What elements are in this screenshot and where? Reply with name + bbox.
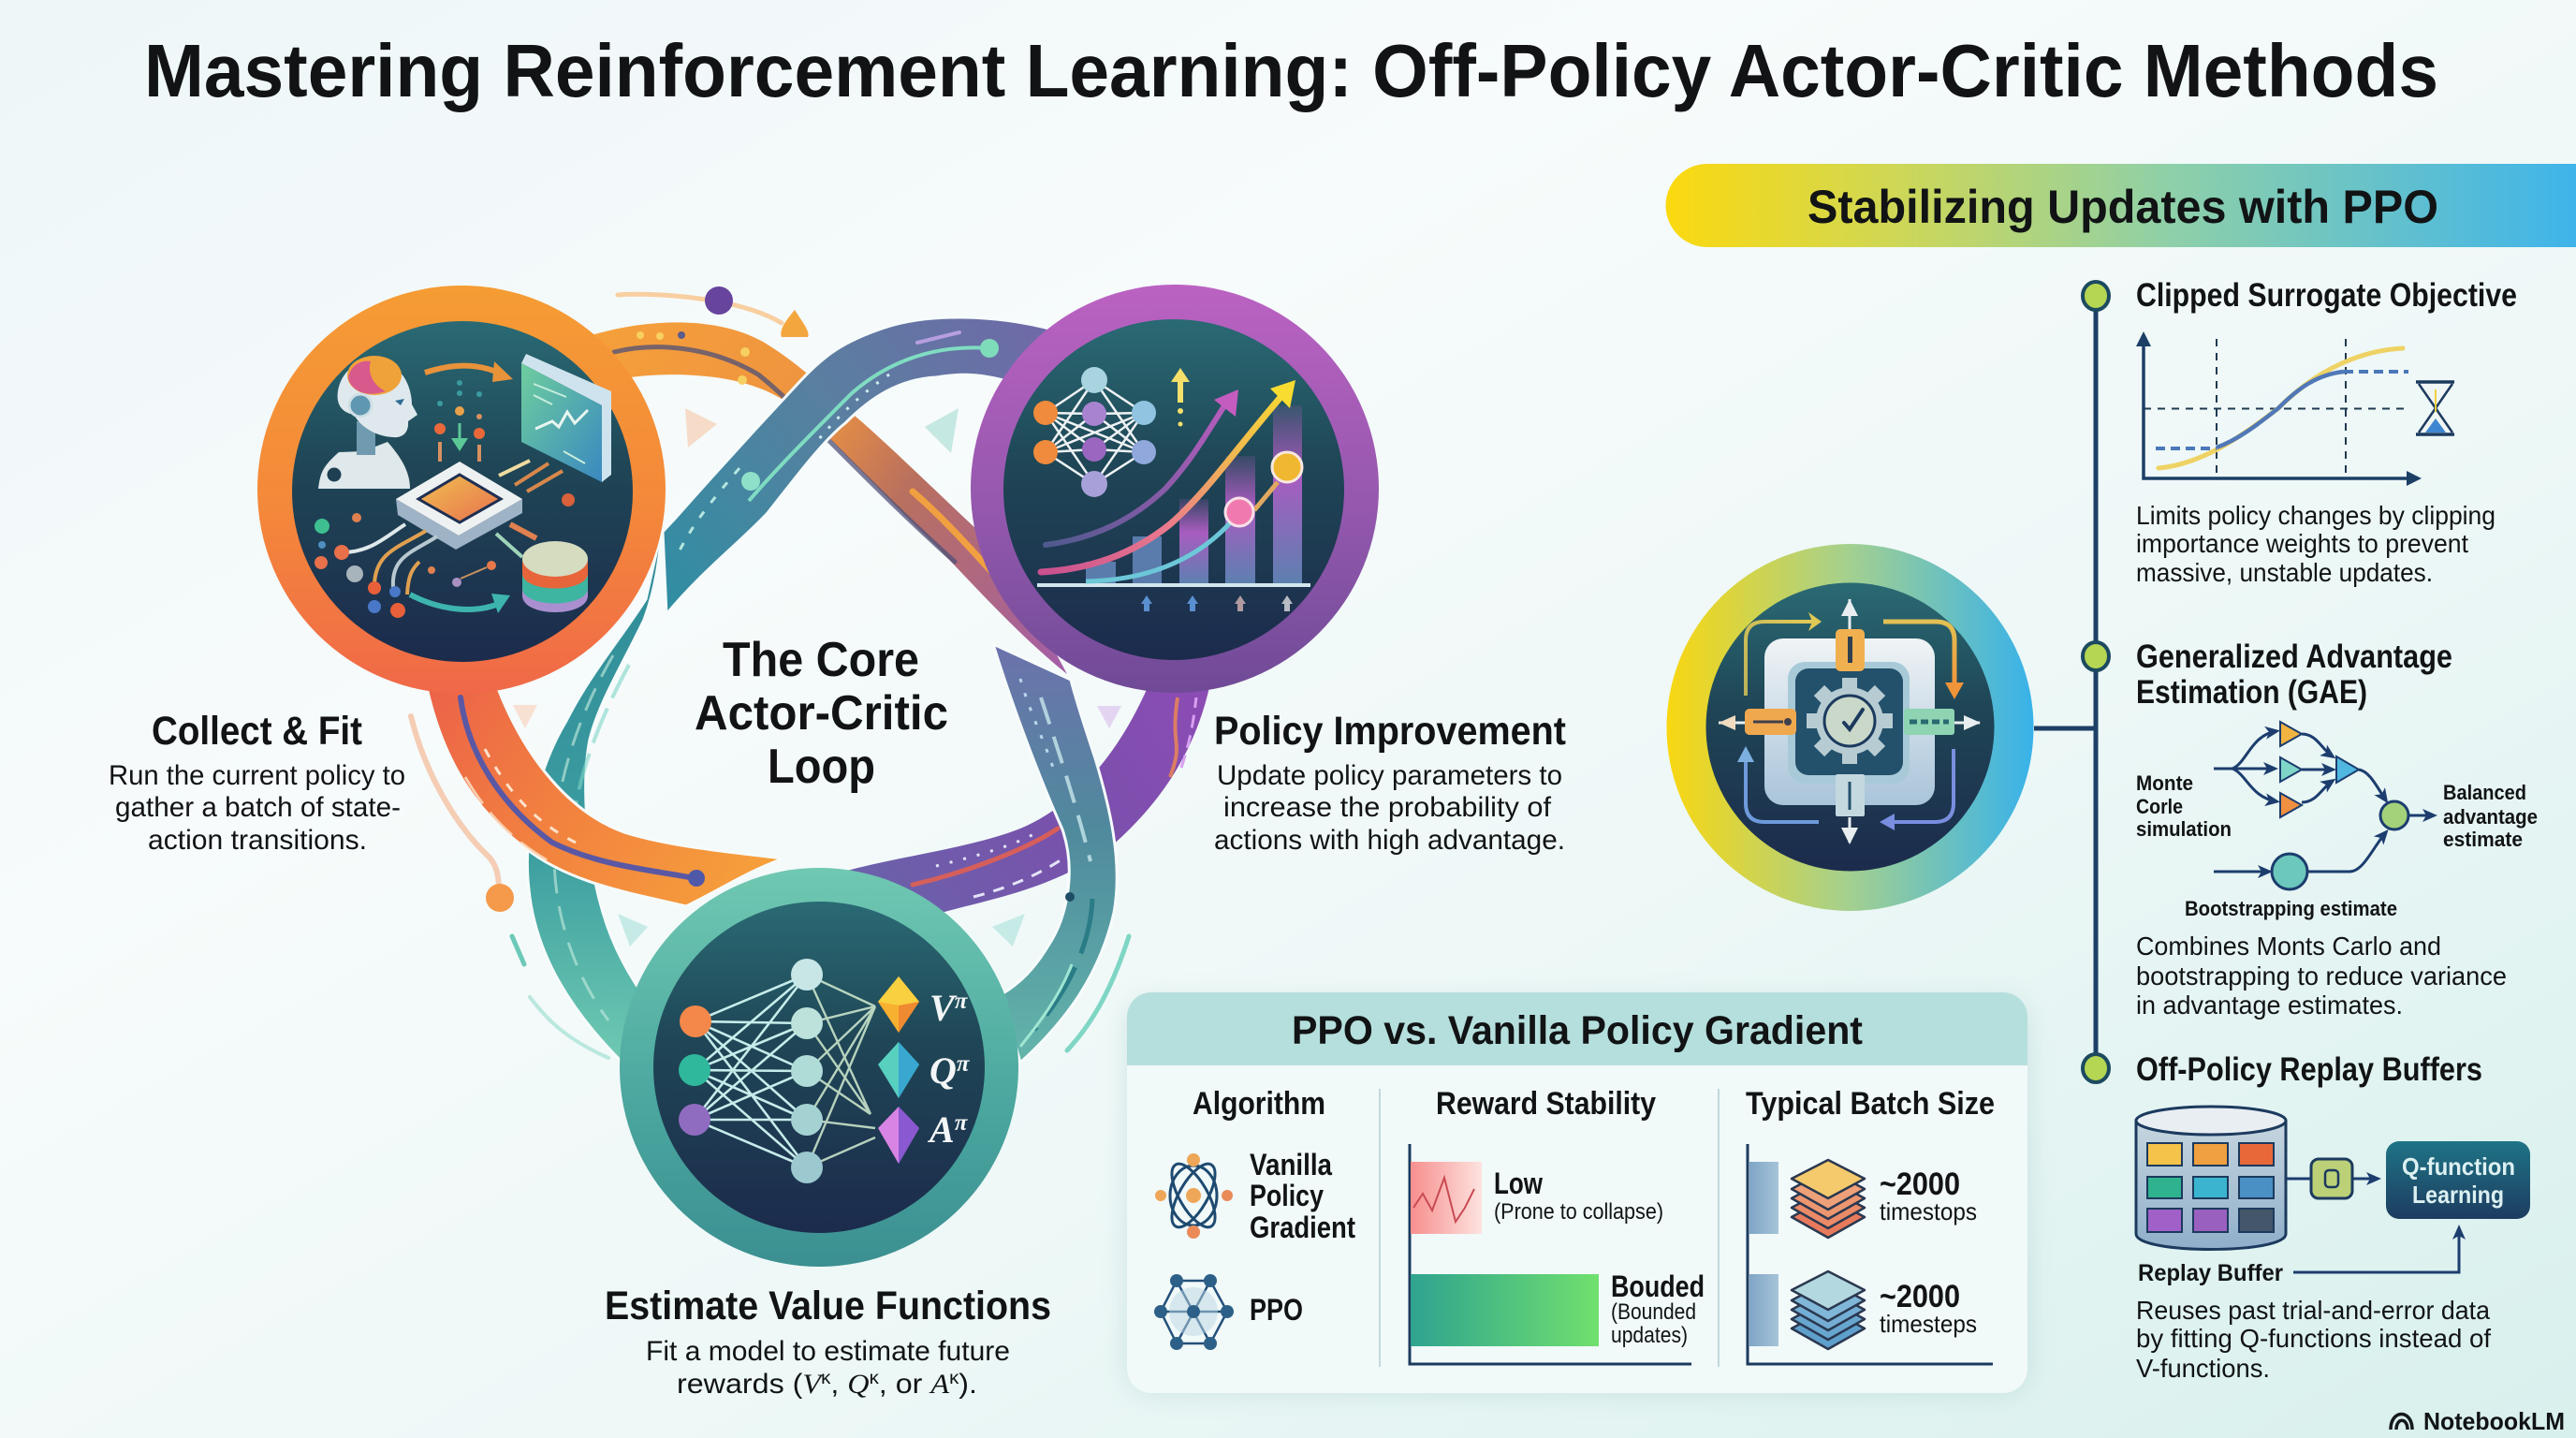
icon: gem A <box>878 1107 919 1164</box>
column: reward stability: Bouded <box>1611 1269 1705 1303</box>
section: generalized advantage estimation: bootstrapping to reduce variance <box>2136 961 2507 990</box>
arrow: purple rising <box>1046 389 1238 545</box>
icon: wires and data dots <box>315 461 575 618</box>
icon: small up arrows <box>1141 595 1293 611</box>
label: monte carlo: simulation <box>2136 817 2232 841</box>
panel: PPO comparison table <box>1127 992 2027 1393</box>
title: Mastering Reinforcement Learning: Off-Policy Actor-Critic Methods <box>144 29 2438 112</box>
label: V pi: π <box>955 989 969 1014</box>
ribbon: orange lower <box>426 683 783 906</box>
column: algorithm: Gradient <box>1250 1211 1355 1244</box>
text block: estimate value functions: κ <box>949 1369 959 1388</box>
icon: up arrow with dots <box>1171 368 1190 427</box>
text block: policy improvement: Policy Improvement <box>1214 709 1566 754</box>
text block: policy improvement: increase the probability of <box>1223 792 1552 823</box>
column: algorithm <box>1154 1086 1355 1350</box>
column: typical batch size: ~2000 <box>1880 1167 1960 1202</box>
section: generalized advantage estimation: Estimation (GAE) <box>2136 674 2367 711</box>
header pill: Stabilizing Updates with PPO <box>1808 181 2438 233</box>
box: Q-function learning: Q-function <box>2402 1152 2515 1181</box>
icon: gear with check <box>1807 678 1893 764</box>
text block: collect and fit: Collect & Fit <box>152 709 362 754</box>
diagram: GAE flow <box>2214 722 2434 889</box>
box: Q-function learning: Learning <box>2412 1181 2504 1209</box>
heading: core loop: Loop <box>768 740 875 794</box>
bar: low <box>1411 1162 1482 1234</box>
header pill <box>1666 164 2576 247</box>
ribbon: teal left <box>527 524 663 1063</box>
label: monte carlo: Corle <box>2136 795 2183 818</box>
column: typical batch size: Typical Batch Size <box>1746 1086 1995 1122</box>
heading: core loop: The Core <box>723 633 919 687</box>
text block: policy improvement <box>1214 709 1566 856</box>
panel: stabilizing updates with PPO <box>1666 164 2576 1383</box>
icon: blue layer stack <box>1792 1271 1865 1349</box>
text block: estimate value functions: κ <box>821 1369 831 1388</box>
label: Q pi: Q <box>929 1049 957 1092</box>
text block: estimate value functions: Fit a model to estimate future <box>646 1336 1010 1367</box>
icon: chip <box>396 462 522 550</box>
text block: estimate value functions: Q <box>847 1369 870 1400</box>
accent: top orbit with dots <box>618 286 809 337</box>
circle: estimate value functions <box>620 868 1018 1267</box>
label: bootstrapping: Bootstrapping estimate <box>2185 897 2397 920</box>
column: reward stability: (Bounded <box>1611 1299 1696 1325</box>
section: off-policy replay buffers <box>2136 1051 2530 1383</box>
column: reward stability: Low <box>1494 1167 1543 1200</box>
icon: signal dots <box>434 380 485 462</box>
logo: NotebookLM: NotebookLM <box>2423 1407 2565 1435</box>
label: A pi: A <box>929 1108 955 1151</box>
icon: teal arrow to database <box>410 594 510 613</box>
circle: stabilizer hub <box>1666 544 2033 911</box>
section: clipped surrogate objective <box>2136 277 2517 587</box>
label: replay buffer: Replay Buffer <box>2138 1260 2283 1286</box>
icon: gem V <box>878 976 919 1033</box>
ribbon: purple to teal upper <box>663 317 1053 614</box>
arrow: pink to yellow rising <box>1041 380 1295 572</box>
icon: monitor with chart <box>521 354 611 482</box>
label: Q pi: π <box>957 1051 971 1077</box>
icon: gem Q <box>878 1042 919 1098</box>
bar: bounded <box>1411 1274 1599 1346</box>
column: reward stability: Reward Stability <box>1436 1086 1656 1122</box>
panel: core actor-critic loop <box>109 285 1566 1400</box>
text block: estimate value functions: κ <box>870 1369 879 1388</box>
icon: policy network <box>1033 367 1156 497</box>
icon: robot with brain <box>318 356 417 489</box>
icon: PPO network <box>1154 1274 1234 1350</box>
text block: collect and fit: gather a batch of state- <box>115 792 401 823</box>
icon: actuator boxes <box>1719 599 1981 844</box>
label: balanced estimate: estimate <box>2443 828 2523 851</box>
accent: left orbit with dot <box>411 716 514 912</box>
box: Q-function learning <box>2386 1141 2530 1219</box>
column: algorithm: Policy <box>1250 1179 1324 1212</box>
label: A pi: π <box>955 1110 969 1136</box>
chart: data points <box>1086 452 1302 581</box>
accent: teal arcs near value circle <box>512 936 1129 1058</box>
icon: neural network <box>679 959 875 1183</box>
arrow: replay feedback <box>2293 1228 2459 1272</box>
chart: rising bars <box>1037 405 1310 587</box>
label: monte carlo: Monte <box>2136 771 2193 795</box>
section: clipped surrogate objective: Clipped Surrogate Objective <box>2136 277 2517 314</box>
column: reward stability <box>1410 1086 1705 1364</box>
text block: estimate value functions: ). <box>959 1369 977 1400</box>
column: typical batch size: timesteps <box>1880 1310 1977 1338</box>
label: balanced estimate: Balanced <box>2443 781 2526 804</box>
text block: policy improvement: Update policy parameters to <box>1217 760 1562 791</box>
text block: collect and fit <box>109 709 405 856</box>
column: typical batch size <box>1746 1086 1995 1364</box>
label: V pi: V <box>929 987 955 1029</box>
timeline <box>2034 282 2109 1082</box>
heading: core loop: Actor-Critic <box>695 686 948 741</box>
text block: collect and fit: action transitions. <box>148 825 367 856</box>
chart: clipped objective <box>2136 331 2454 486</box>
icon: replay buffer cylinder <box>2136 1107 2286 1249</box>
text block: estimate value functions: Estimate Value Functions <box>605 1284 1051 1328</box>
heading: core loop <box>695 633 948 794</box>
label: monte carlo <box>2136 771 2232 841</box>
text block: collect and fit: Run the current policy to <box>109 760 405 791</box>
column: algorithm: PPO <box>1250 1293 1303 1327</box>
section: generalized advantage estimation: Combines Monts Carlo and <box>2136 932 2441 961</box>
column: algorithm: Vanilla <box>1250 1148 1332 1181</box>
section: off-policy replay buffers: V-functions. <box>2136 1354 2270 1383</box>
column: typical batch size: ~2000 <box>1880 1279 1960 1314</box>
label: balanced estimate: advantage <box>2443 805 2538 829</box>
icon: atom <box>1155 1153 1233 1239</box>
ribbon: purple lower right <box>847 674 1212 913</box>
section: generalized advantage estimation: Generalized Advantage <box>2136 638 2452 675</box>
icon: hourglass <box>2416 382 2454 434</box>
icon: database <box>522 541 588 612</box>
ribbon: orange upper <box>571 322 1067 674</box>
column: reward stability: updates) <box>1611 1323 1688 1348</box>
section: off-policy replay buffers: Off-Policy Replay Buffers <box>2136 1051 2482 1088</box>
section: generalized advantage estimation: in advantage estimates. <box>2136 990 2403 1020</box>
section: generalized advantage estimation <box>2136 638 2538 1020</box>
decorative pale direction triangles <box>513 408 1121 946</box>
column: typical batch size: timestops <box>1880 1197 1977 1225</box>
arrow: buffer to Q-function <box>2287 1159 2378 1198</box>
section: off-policy replay buffers: Reuses past trial-and-error data <box>2136 1296 2490 1325</box>
icon: control frame <box>1764 638 1935 805</box>
text block: estimate value functions: A <box>929 1369 950 1400</box>
text block: policy improvement: actions with high advantage. <box>1214 825 1565 856</box>
arrowheads <box>1737 612 1964 830</box>
icon: orange arrow to monitor <box>425 361 513 382</box>
circle: policy improvement <box>971 285 1379 693</box>
icon: orange layer stack <box>1792 1160 1865 1238</box>
circle: collect and fit <box>257 286 666 694</box>
section: clipped surrogate objective: Limits policy changes by clipping <box>2136 501 2496 530</box>
text block: estimate value functions <box>605 1284 1051 1400</box>
column: reward stability: (Prone to collapse) <box>1494 1199 1663 1225</box>
text block: estimate value functions: , <box>830 1369 847 1400</box>
label: balanced estimate <box>2443 781 2538 851</box>
text block: estimate value functions: rewards ( V <box>677 1369 820 1400</box>
section: clipped surrogate objective: massive, unstable updates. <box>2136 558 2433 587</box>
table heading: PPO vs. Vanilla Policy Gradient <box>1292 1008 1863 1053</box>
text block: estimate value functions: , or <box>879 1369 930 1400</box>
section: off-policy replay buffers: by fitting Q-functions instead of <box>2136 1324 2491 1353</box>
column: algorithm: Algorithm <box>1193 1086 1325 1122</box>
ribbon: slate to teal right <box>993 644 1117 1063</box>
arrows: circulation paths <box>1746 622 1954 822</box>
section: clipped surrogate objective: importance weights to prevent <box>2136 529 2468 558</box>
